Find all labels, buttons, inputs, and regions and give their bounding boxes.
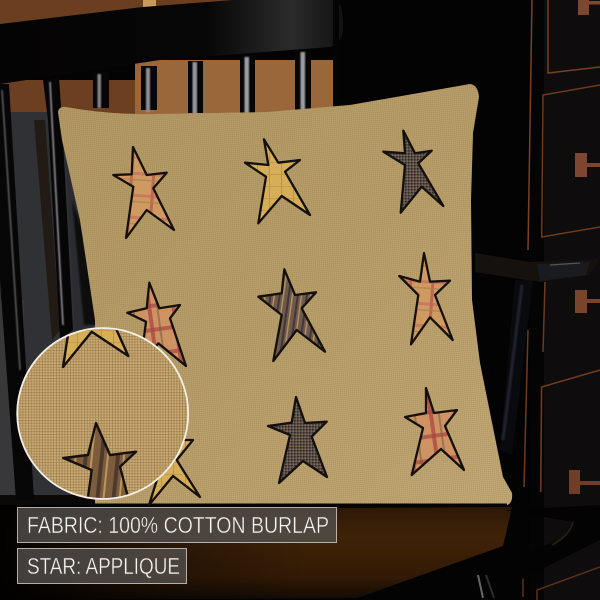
- applique stars on pillow: [113, 131, 464, 505]
- spindle: left: [43, 78, 73, 340]
- spindle: far left: [0, 84, 34, 500]
- icon: drawer handle lower: [575, 290, 600, 313]
- dresser with copper trim and handles: [523, 0, 600, 600]
- star: bottom left yellow: [149, 440, 200, 505]
- star: top left plaid: [113, 147, 174, 238]
- chair: top rail and spindles: [0, 0, 343, 500]
- star: middle left plaid: [127, 283, 186, 368]
- star: top right check: [383, 131, 443, 213]
- table seat surface: [0, 505, 600, 600]
- star: middle centre stripe: [258, 269, 325, 361]
- magnified star fragments: [63, 322, 136, 505]
- label: star: [18, 548, 186, 584]
- star: middle right plaid: [399, 253, 453, 344]
- pillow: burlap body: [58, 84, 512, 505]
- star: bottom right plaid: [405, 388, 464, 475]
- label: star: STAR: APPLIQUE: [27, 553, 180, 579]
- icon: drawer handle top: [578, 0, 600, 15]
- star: top centre yellow: [245, 139, 310, 223]
- label: fabric: [18, 508, 336, 542]
- icon: drawer handle bottom: [569, 470, 600, 494]
- magnifier callout: burlap close-up: [17, 322, 188, 505]
- rail: [0, 0, 343, 84]
- chair arm and support: [475, 253, 600, 455]
- label: fabric: FABRIC: 100% COTTON BURLAP: [27, 512, 329, 538]
- star: bottom centre check: [268, 397, 327, 483]
- icon: drawer handle middle: [575, 153, 600, 177]
- spindle group: upper short spindles: [93, 50, 311, 114]
